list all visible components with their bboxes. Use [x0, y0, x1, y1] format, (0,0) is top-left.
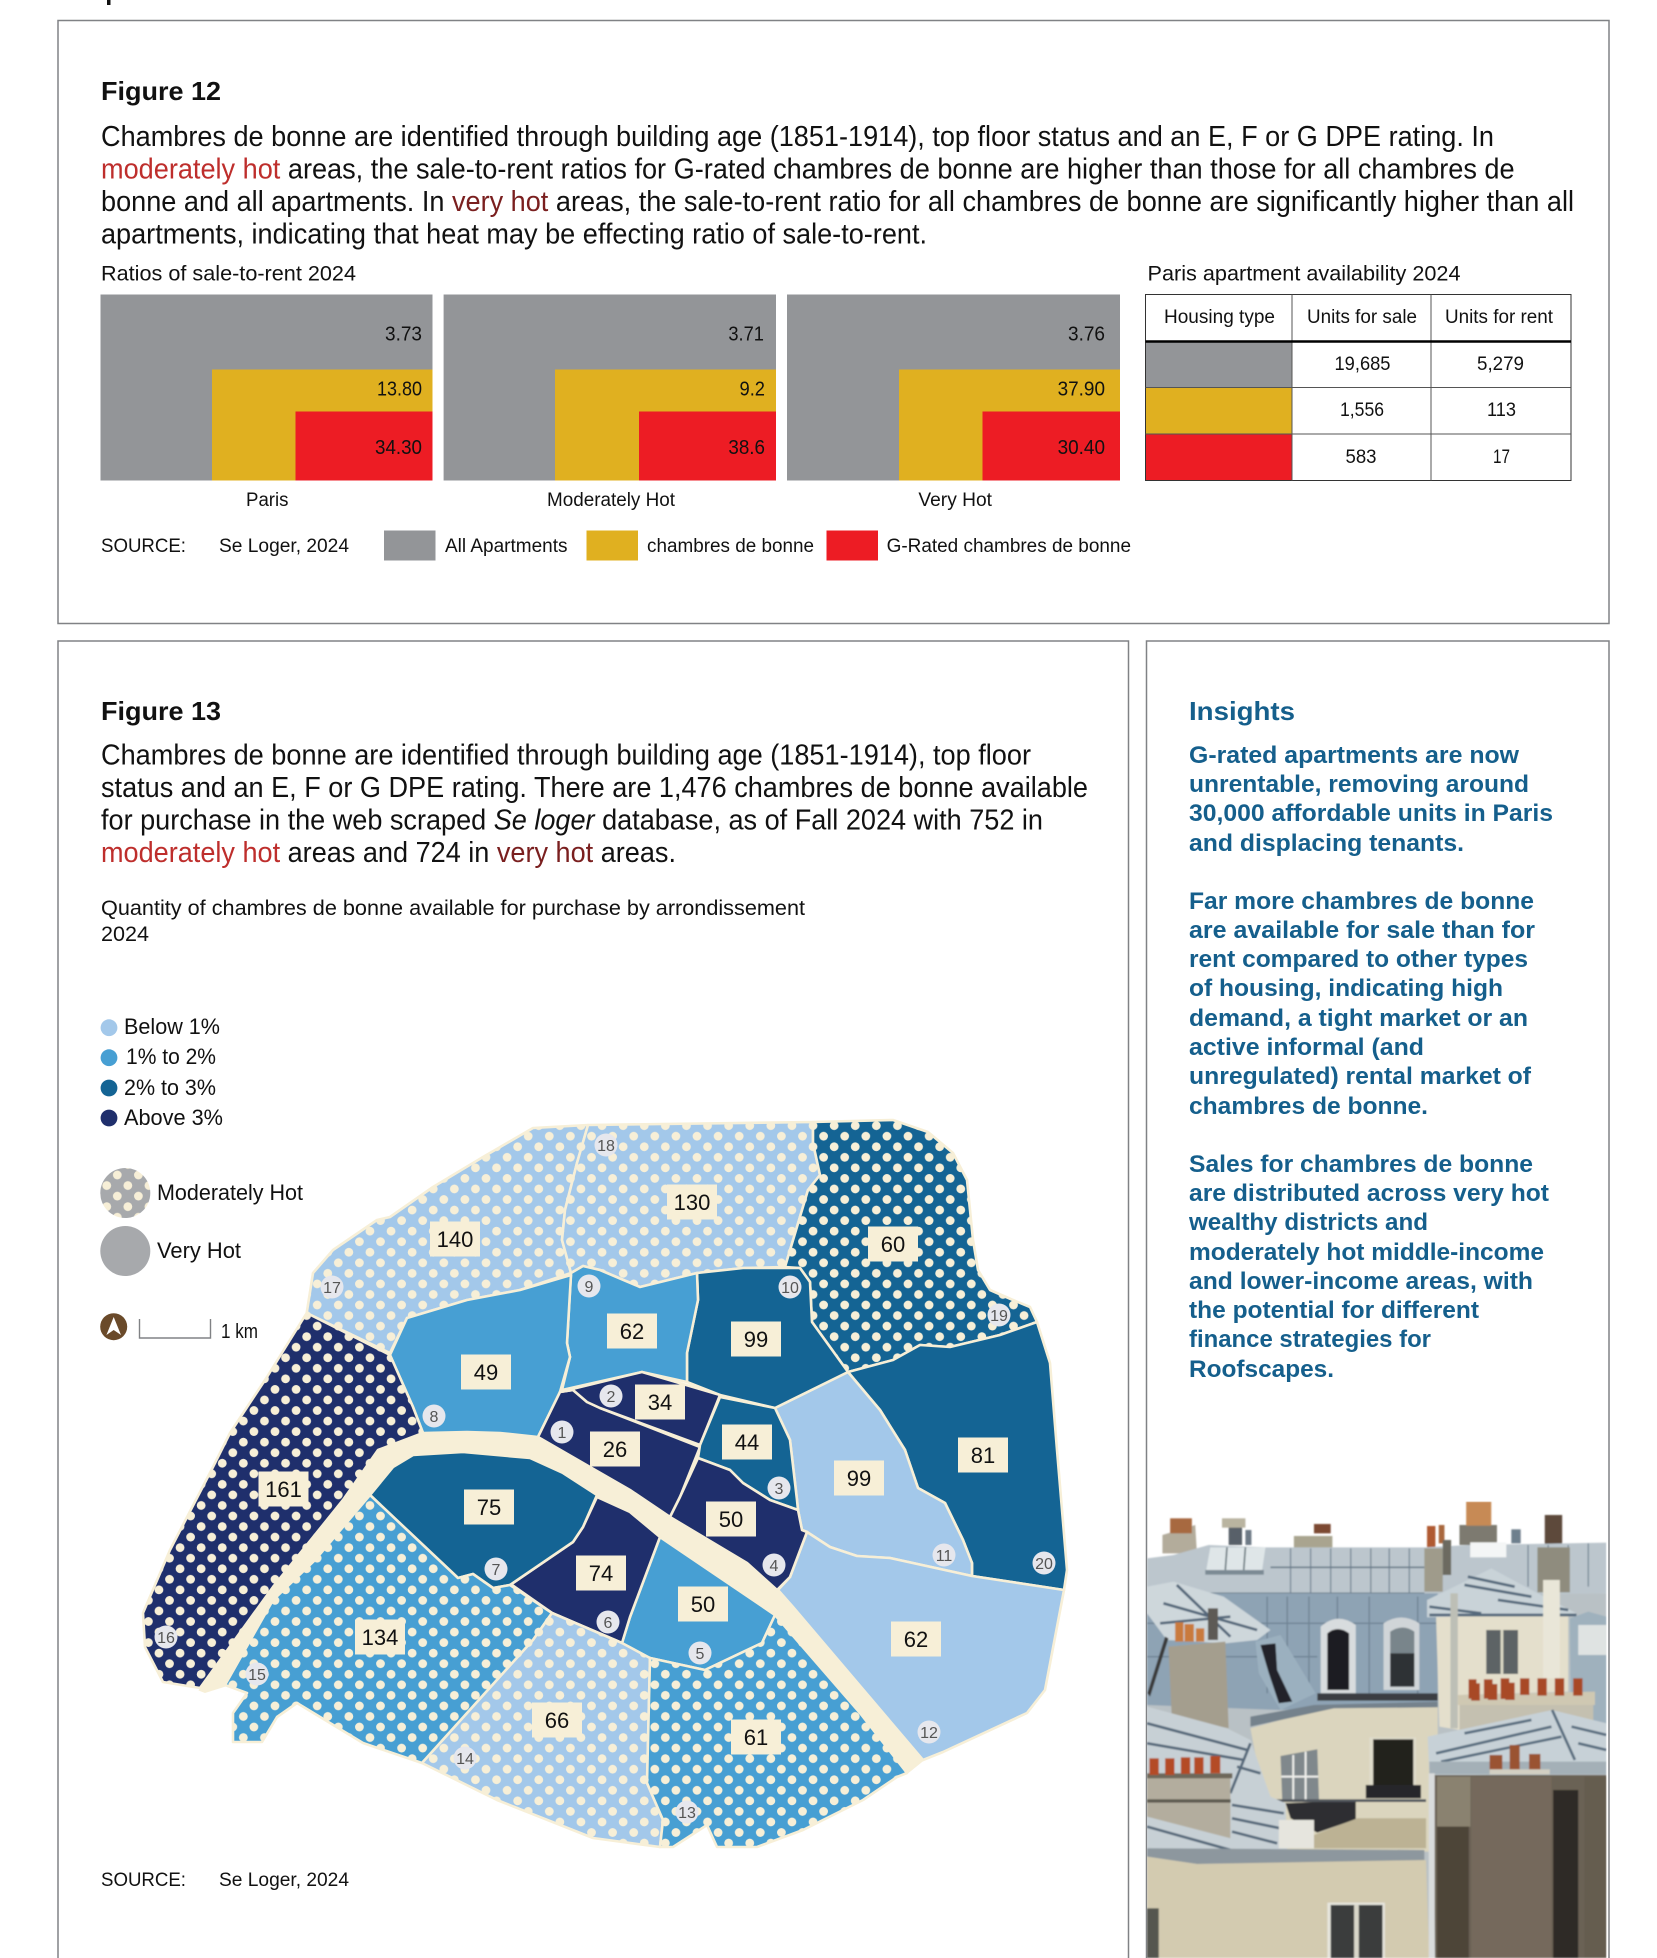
arrondissement value labels: 62 [620, 1319, 644, 1344]
legend: share percent: Below 1% [124, 1014, 220, 1039]
icon: north arrow [100, 1313, 127, 1340]
brick wall [1433, 1775, 1606, 1958]
legend: housing types: G-Rated chambres de bonne [887, 536, 1131, 557]
arched windows [1321, 1619, 1356, 1693]
legend: share percent: Above 3% [124, 1105, 223, 1130]
text block: insight one: unrentable, removing around [1189, 771, 1529, 798]
panel: figure 12 [58, 20, 1609, 624]
text block: insight three: Roofscapes. [1189, 1356, 1334, 1383]
arrondissement number markers: 6 [604, 1615, 613, 1632]
chart: Moderately Hot ratios: 38.6 [728, 437, 765, 459]
left dormer [1255, 1635, 1316, 1710]
text block: insight two: rent compared to other types [1189, 946, 1528, 973]
table: availability [1146, 294, 1571, 480]
text block: insight three: wealthy districts and [1188, 1209, 1428, 1236]
arrondissement number markers: 19 [990, 1308, 1008, 1325]
text block: insight two: are available for sale than for [1189, 917, 1535, 944]
arrondissement value labels: 74 [589, 1561, 613, 1586]
heading: insights: Insights [1189, 696, 1295, 726]
arrondissement number markers: 8 [430, 1409, 439, 1426]
text block: figure 12 description: moderately hot areas, the sale-to-rent ratios for G-rated chambres de bonne are higher than those for all chambres de [101, 153, 1515, 185]
text block: insight two: unregulated) rental market of [1189, 1063, 1532, 1090]
chart: Very Hot ratios: Very Hot [918, 490, 993, 511]
text block: figure 13 description: Chambres de bonne are identified through building age (1851-1914), top floor [101, 740, 1031, 772]
source note: Se Loger, 2024 [219, 1870, 349, 1891]
text block: insight two: of housing, indicating high [1189, 975, 1503, 1002]
right blue dormer [1570, 1612, 1606, 1727]
chart: Moderately Hot ratios: 9.2 [740, 378, 765, 400]
chart: Very Hot ratios [787, 294, 1120, 511]
arrondissement number markers: 4 [770, 1558, 779, 1575]
chart: Paris ratios: 13.80 [377, 378, 422, 400]
source note [101, 536, 349, 557]
arrondissement value labels [258, 1184, 1008, 1754]
table: availability: 5,279 [1477, 354, 1524, 375]
arrondissement value labels: 50 [719, 1507, 743, 1532]
scale bar [140, 1319, 258, 1343]
text block: insight one: G-rated apartments are now [1189, 742, 1519, 769]
arrondissement number markers [154, 1134, 1056, 1824]
arrondissement number markers: 15 [248, 1667, 266, 1684]
chart: Paris ratios: 34.30 [375, 437, 422, 459]
panel: insights [1146, 641, 1609, 1958]
arrondissement number markers: 10 [781, 1280, 799, 1297]
heading: figure 13: Figure 13 [101, 696, 221, 726]
text block: insight three: are distributed across very hot [1189, 1180, 1549, 1207]
chart: Paris ratios [100, 294, 432, 511]
arrondissement number markers: 5 [696, 1646, 705, 1663]
table: availability: 17 [1493, 447, 1510, 468]
scale bar: 1 km [221, 1321, 258, 1343]
arrondissement number markers: 11 [936, 1548, 952, 1565]
source note [101, 1870, 349, 1891]
map: Paris arrondissements [143, 1120, 1067, 1847]
text block: figure 13 description: status and an E, F or G DPE rating. There are 1,476 chambres de bonne available [101, 772, 1088, 804]
text block: insight three: Sales for chambres de bonne [1189, 1151, 1533, 1178]
arrondissement number markers: 12 [920, 1725, 938, 1742]
chart: Moderately Hot ratios: 3.71 [728, 324, 764, 346]
text block: insight two: chambres de bonne. [1189, 1093, 1428, 1120]
chart title: quantity by arrondissement: Quantity of chambres de bonne available for purchase by arrondissement [101, 897, 805, 920]
arrondissement number markers: 9 [585, 1279, 594, 1296]
chart: Moderately Hot ratios [444, 294, 776, 511]
arrondissement value labels: 161 [265, 1477, 302, 1502]
left chimney stack [1168, 1642, 1229, 1728]
source note: SOURCE: [101, 1870, 186, 1891]
chimney pot row [1458, 1692, 1595, 1705]
bottom facade [1147, 1848, 1424, 1864]
arrondissement value labels: 134 [362, 1625, 398, 1650]
legend: share percent: 1% to 2% [126, 1044, 216, 1069]
chart title: ratios of sale-to-rent: Ratios of sale-to-rent 2024 [101, 262, 356, 286]
mansard wall [1147, 1593, 1438, 1710]
photo base tone [1147, 1593, 1606, 1958]
right zinc roof [1428, 1710, 1606, 1776]
arrondissement value labels: 50 [691, 1592, 715, 1617]
arrondissement number markers: 14 [456, 1751, 474, 1768]
chart title: quantity by arrondissement [101, 897, 805, 946]
arrondissement number markers: 2 [607, 1389, 616, 1406]
text block: figure 13 description: for purchase in the web scraped Se loger database, as of Fall 2024 with 752 in [101, 804, 1043, 836]
arrondissement shapes [143, 1120, 1067, 1847]
arrondissement value labels: 61 [744, 1725, 768, 1750]
arrondissement value labels: 49 [474, 1360, 498, 1385]
table title: Paris apartment availability 2024 [1148, 262, 1461, 286]
source note: SOURCE: [101, 536, 186, 557]
right cream dormer [1436, 1616, 1568, 1730]
illustration: Paris rooftops [1147, 1502, 1606, 1958]
back zinc roof [1147, 1543, 1606, 1600]
text block: insight three: moderately hot middle-income [1189, 1239, 1544, 1266]
legend: heat zones [100, 1168, 303, 1276]
text block: insight three: finance strategies for [1189, 1326, 1431, 1353]
legend: housing types: chambres de bonne [647, 536, 814, 557]
text block: insight three: the potential for different [1189, 1297, 1479, 1324]
table: availability: 113 [1487, 400, 1516, 421]
text block: insight two [1189, 888, 1535, 1120]
legend: heat zones: Very Hot [157, 1238, 241, 1263]
arrondissement value labels: 99 [847, 1466, 871, 1491]
text block: figure 12 description: apartments, indicating that heat may be effecting ratio of sale-to-rent. [101, 219, 927, 251]
legend: housing types [384, 530, 1131, 560]
text block: figure 12 description: Chambres de bonne are identified through building age (1851-1914), top floor status and an E, F or G DPE rating. In [101, 121, 1494, 153]
left curved dormer roof [1147, 1582, 1270, 1643]
arrondissement value labels: 75 [477, 1495, 501, 1520]
legend: share percent [101, 1014, 223, 1130]
middle cream facade [1250, 1707, 1438, 1852]
arrondissement value labels: 140 [437, 1227, 473, 1252]
chart: Very Hot ratios: 3.76 [1068, 324, 1105, 346]
arrondissement value labels: 130 [674, 1190, 710, 1215]
table: availability: 583 [1346, 447, 1376, 468]
text block: insight two: Far more chambres de bonne [1189, 888, 1534, 915]
arrondissement value labels: 62 [904, 1627, 928, 1652]
arrondissement number markers: 3 [775, 1481, 784, 1498]
text block: insight two: active informal (and [1189, 1034, 1424, 1061]
chart title: quantity by arrondissement: 2024 [101, 923, 149, 946]
text block: insight one [1189, 742, 1553, 857]
text block: insight three [1188, 1151, 1549, 1383]
back chimneys [1162, 1502, 1562, 1553]
arrondissement number markers: 20 [1035, 1556, 1053, 1573]
arrondissement value labels: 26 [603, 1437, 627, 1462]
chart: Very Hot ratios: 30.40 [1058, 437, 1105, 459]
legend: heat zones: Moderately Hot [157, 1180, 303, 1205]
heading: figure 12: Figure 12 [101, 76, 221, 106]
text block: insight two: demand, a tight market or an [1189, 1005, 1528, 1032]
text block: figure 12 description: bonne and all apartments. In very hot areas, the sale-to-rent ratio for all chambres de bonne are significantly higher than all [101, 186, 1574, 218]
text block: figure 13 description: moderately hot areas and 724 in very hot areas. [101, 837, 676, 869]
arrondissement number markers: 16 [157, 1630, 175, 1647]
arrondissement number markers: 18 [597, 1138, 615, 1155]
arrondissement number markers: 7 [492, 1562, 501, 1579]
arrondissement value labels: 99 [744, 1327, 768, 1352]
text block: insight one: 30,000 affordable units in Paris [1189, 800, 1553, 827]
chart: Paris ratios: Paris [246, 490, 288, 511]
arrondissement number markers: 17 [323, 1280, 341, 1297]
legend: share percent: 2% to 3% [124, 1075, 216, 1100]
arrondissement number markers: 13 [678, 1805, 696, 1822]
arrondissement value labels: 60 [881, 1232, 905, 1257]
panel: figure 13 [58, 641, 1128, 1958]
right chimneys [1424, 1548, 1443, 1592]
arrondissement value labels: 66 [545, 1708, 569, 1733]
left lower roof [1147, 1707, 1287, 1857]
text block: insight one: and displacing tenants. [1189, 830, 1464, 857]
chart: Moderately Hot ratios: Moderately Hot [547, 490, 676, 511]
arrondissement value labels: 44 [735, 1430, 759, 1455]
text block: insight three: and lower-income areas, with [1189, 1268, 1533, 1295]
table: availability: 19,685 [1334, 354, 1390, 375]
source note: Se Loger, 2024 [219, 536, 349, 557]
chart: Very Hot ratios: 37.90 [1058, 378, 1105, 400]
table: availability: Units for rent [1445, 307, 1554, 328]
arrondissement value labels: 34 [648, 1390, 672, 1415]
river Seine [200, 1432, 923, 1773]
table: availability: Housing type [1164, 307, 1275, 328]
balcony [1286, 1800, 1356, 1833]
table: availability: 1,556 [1340, 400, 1384, 421]
arrondissement number markers: 1 [558, 1425, 567, 1442]
table: availability: Units for sale [1307, 307, 1417, 328]
text block: figure 13 description [101, 740, 1088, 869]
arrondissement value labels: 81 [971, 1443, 995, 1468]
legend: housing types: All Apartments [445, 536, 568, 557]
text block: figure 12 description [101, 121, 1574, 251]
chart: Paris ratios: 3.73 [385, 324, 422, 346]
